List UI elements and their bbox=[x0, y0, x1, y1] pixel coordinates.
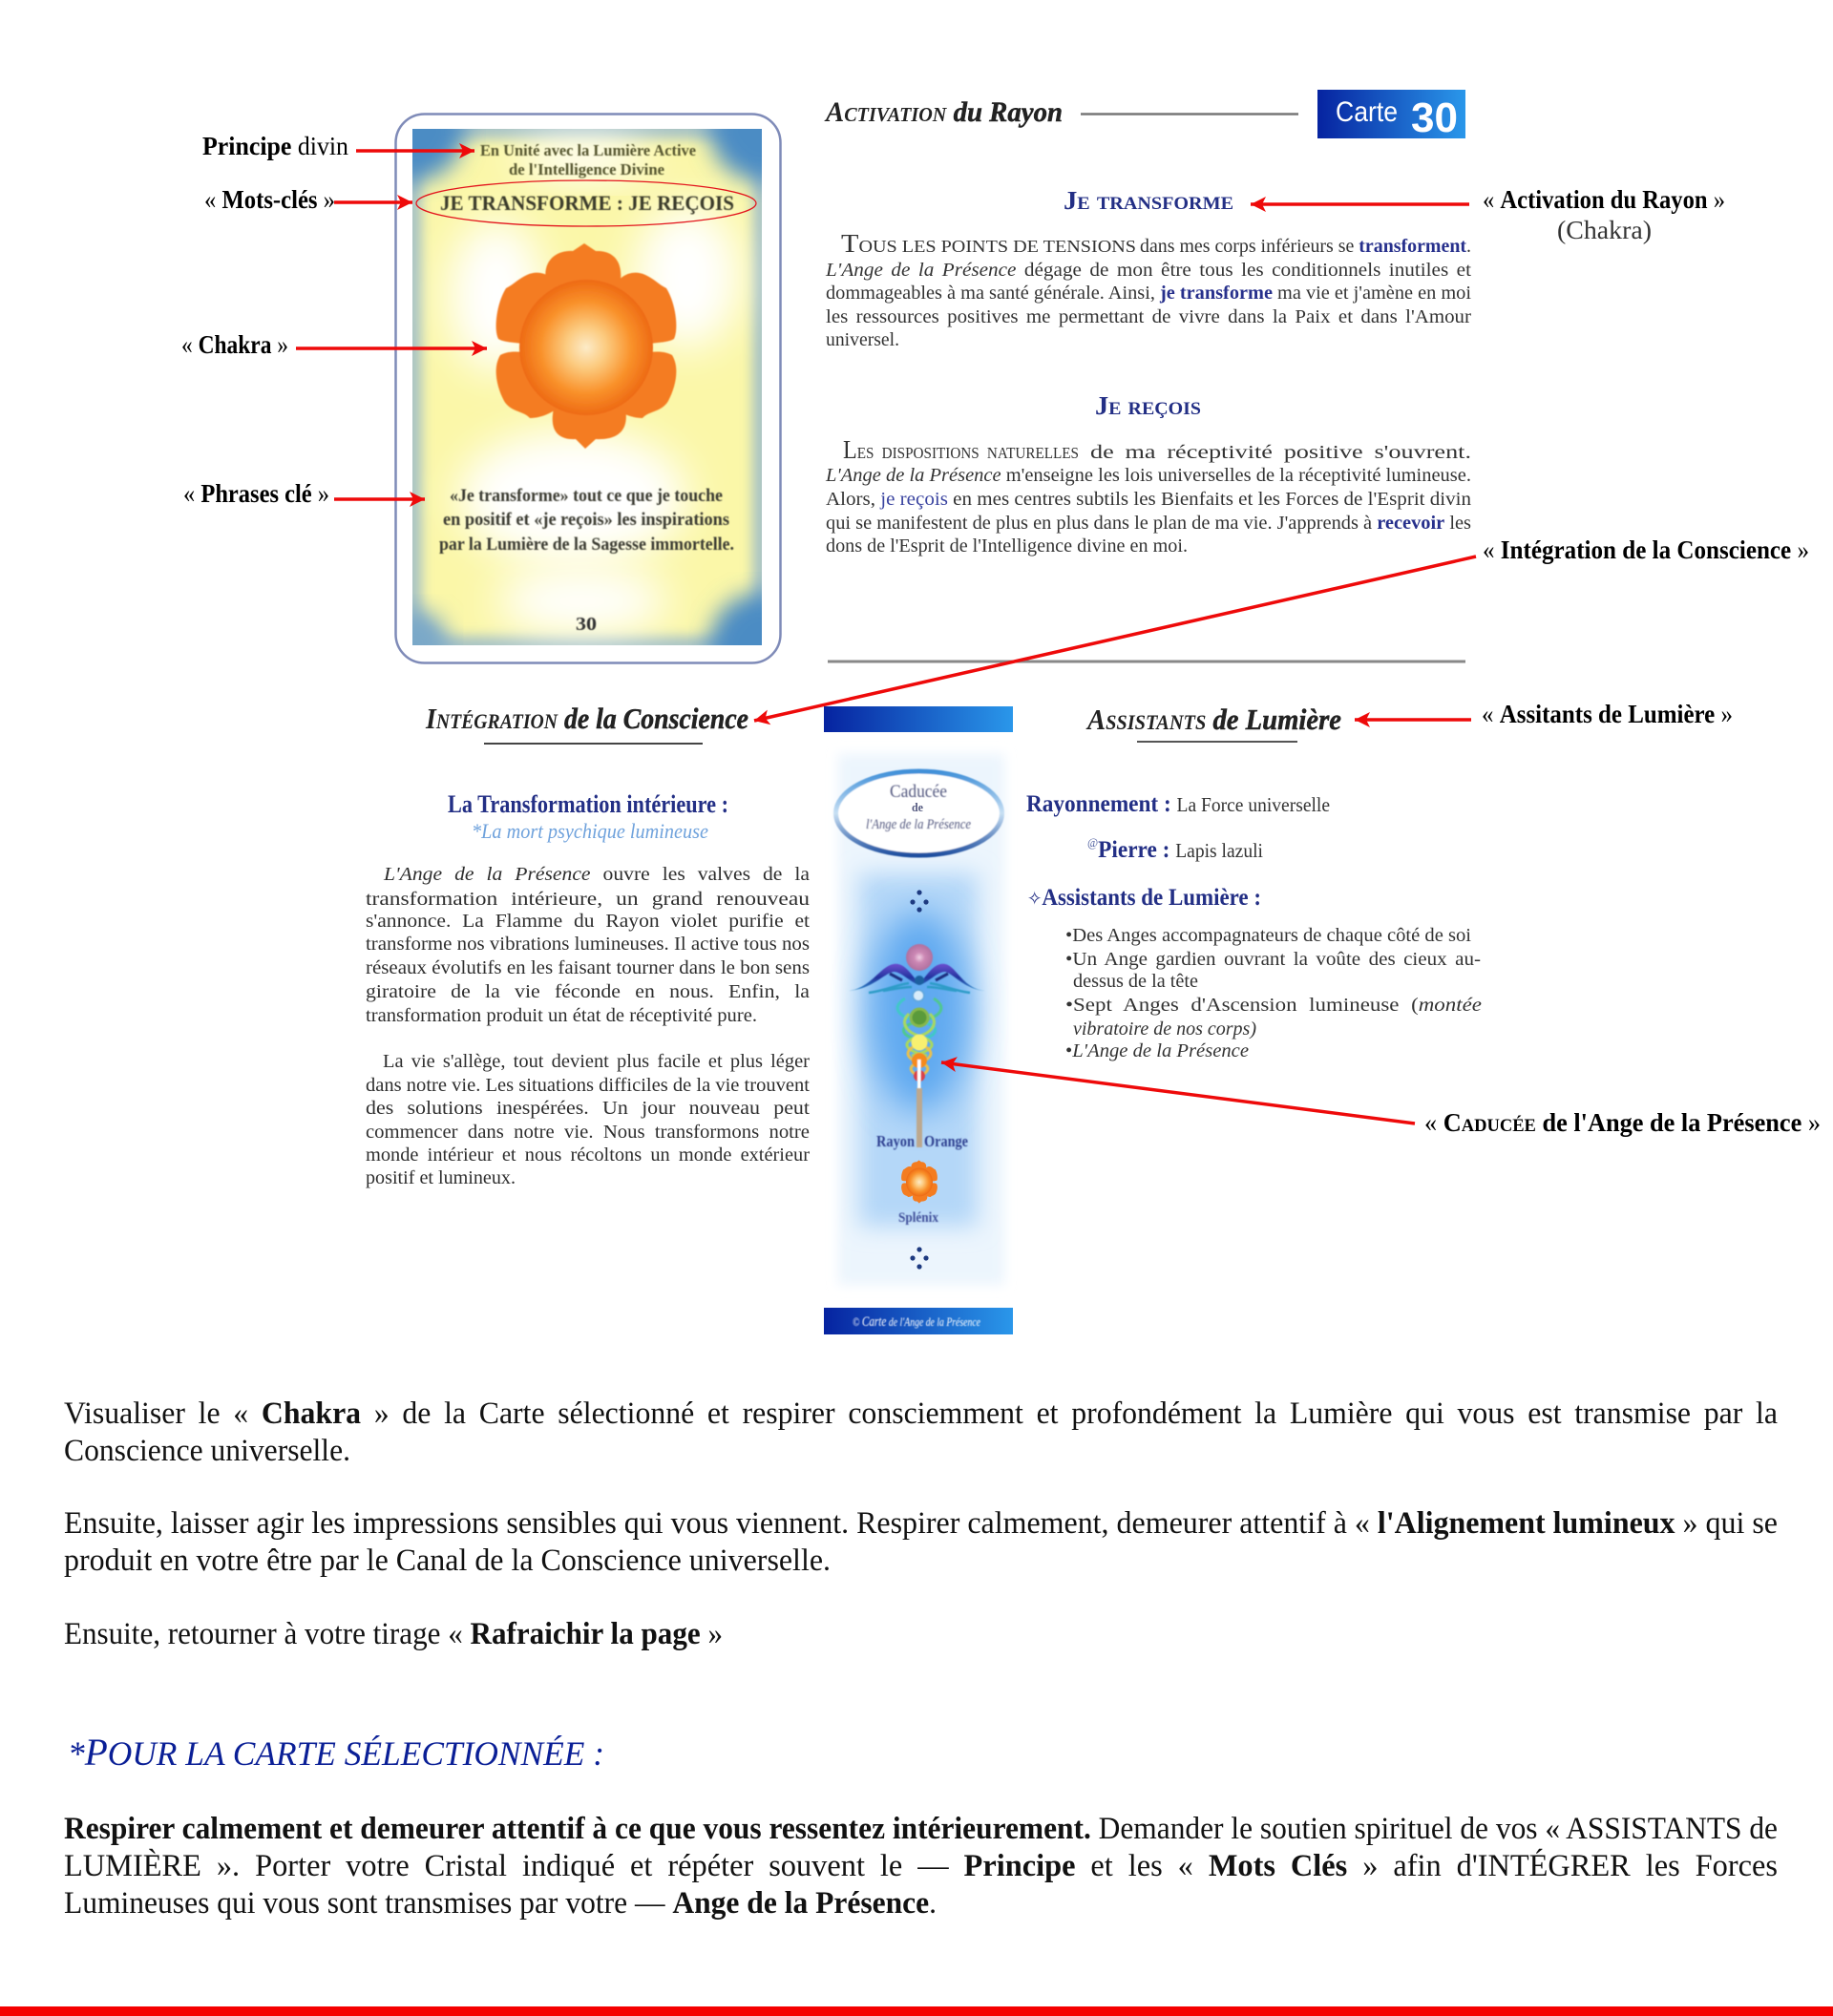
text block: paragraph two bbox=[366, 1051, 810, 1188]
card text bbox=[439, 141, 734, 635]
pierre line: Lapis lazuli bbox=[1175, 839, 1263, 862]
text block: je reçois: LES DISPOSITIONS NATURELLES bbox=[843, 435, 1079, 464]
text block: je reçois: L'Ange de la Présence m'enseigne les lois universelles de la réceptivité lumineuse. bbox=[825, 465, 1471, 486]
heading: intégration: Intégration de la Conscience bbox=[425, 702, 748, 735]
label: activation du rayon: « Activation du Rayon » bbox=[1483, 185, 1725, 214]
subtitle: *La mort psychique lumineuse bbox=[472, 819, 708, 843]
card outline bbox=[395, 115, 781, 662]
heading: je reçois: Je reçois bbox=[1095, 391, 1201, 420]
bullet list bbox=[1065, 925, 1482, 1061]
bullet list: •Un Ange gardien ouvrant la voûte des cieux au- bbox=[1065, 949, 1481, 970]
text block: je reçois: qui se manifestent de plus en plus dans le plan de ma vie. J'apprends à recevoir les bbox=[826, 513, 1471, 534]
badge: carte 30 bbox=[1317, 90, 1465, 141]
chakra flower bbox=[496, 243, 676, 449]
text block: je reçois: de ma réceptivité positive s'ouvrent. bbox=[1090, 442, 1471, 463]
text block: je transforme: TOUS LES POINTS DE TENSIONS bbox=[841, 229, 1136, 258]
caducée title ellipse bbox=[836, 771, 1002, 855]
pierre line: @ bbox=[1087, 835, 1098, 850]
panel: assistants de lumière bbox=[1026, 703, 1482, 1061]
text block: paragraph one: giratoire de la vie féconde en nous. Enfin, la bbox=[366, 981, 810, 1002]
heading: pour la carte sélectionnée: *POUR LA CARTE SÉLECTIONNÉE : bbox=[68, 1731, 604, 1774]
heading: assistants: Assistants de Lumière bbox=[1085, 703, 1341, 736]
label: phrases clé: « Phrases clé » bbox=[183, 479, 329, 508]
text block: closing paragraph: LUMIÈRE ». Porter votre Cristal indiqué et répéter souvent le — Principe et les « Mots Clés » afin d'INTÉGRER les Forces bbox=[64, 1848, 1778, 1883]
paragraph: visualiser bbox=[64, 1396, 1778, 1468]
divine principle text bbox=[480, 141, 696, 178]
paragraph: ensuite: Ensuite, laisser agir les impressions sensibles qui vous viennent. Respirer calmement, demeurer attentif à « l'Alignement lumineux » qui se bbox=[64, 1506, 1778, 1541]
wings bbox=[848, 964, 985, 993]
heading: activation du rayon: Activation du Rayon bbox=[824, 96, 1063, 128]
arrow: caducée bbox=[941, 1062, 1415, 1124]
bullet list: •L'Ange de la Présence bbox=[1065, 1040, 1249, 1061]
arrow: phrases bbox=[334, 497, 425, 501]
key phrase text bbox=[439, 486, 734, 555]
label: splénix: Splénix bbox=[898, 1210, 938, 1226]
paragraph: ensuite bbox=[64, 1506, 1778, 1578]
arrows: left annotations bbox=[296, 151, 487, 499]
top bar bbox=[824, 706, 1013, 732]
bullet list: •Sept Anges d'Ascension lumineuse ( montée bbox=[1065, 995, 1482, 1016]
arrow: chakra bbox=[296, 346, 487, 350]
key phrase text: en positif et «je reçois» les inspirations bbox=[443, 510, 729, 530]
heart chakra bbox=[911, 1009, 928, 1026]
text block: paragraph two: dans notre vie. Les situations difficiles de la vie trouvent bbox=[366, 1075, 810, 1096]
text block: je reçois bbox=[825, 435, 1471, 556]
subheading: la transformation intérieure: La Transformation intérieure : bbox=[448, 790, 728, 818]
text block: paragraph two: monde intérieur et nous récoltons un monde extérieur bbox=[366, 1144, 810, 1166]
panel: activation du rayon bbox=[824, 90, 1471, 662]
text block: paragraph two: commencer dans notre vie. Nous transformons notre bbox=[366, 1122, 810, 1143]
text block: je transforme bbox=[825, 229, 1471, 350]
arrow: mots-clés bbox=[334, 200, 412, 204]
caducée title ellipse: Caducée bbox=[890, 782, 947, 802]
caducée title ellipse: de bbox=[912, 800, 923, 814]
text block: paragraph one: réseaux évolutifs en les faisant tourner dans le bon sens bbox=[366, 957, 810, 978]
key phrase text: par la Lumière de la Sagesse immortelle. bbox=[439, 535, 734, 555]
badge: carte 30: 30 bbox=[1411, 94, 1458, 141]
label: caducée: « Caducée de l'Ange de la Présence » bbox=[1424, 1108, 1821, 1137]
key phrase text: «Je transforme» tout ce que je touche bbox=[450, 486, 723, 506]
card number: 30 bbox=[576, 614, 597, 635]
label: intégration de la conscience: « Intégration de la Conscience » bbox=[1483, 536, 1809, 564]
white staff bbox=[917, 1060, 920, 1088]
bullet list: •Des Anges accompagnateurs de chaque côté de soi bbox=[1065, 925, 1471, 946]
heading: je transforme: Je transforme bbox=[1064, 186, 1233, 215]
icon: top dots bbox=[910, 890, 929, 913]
rod bbox=[916, 1088, 922, 1147]
key words ellipse bbox=[416, 180, 756, 226]
icon: bottom dots bbox=[910, 1247, 929, 1270]
text block: instructions bbox=[64, 1396, 1778, 1651]
bullet list: dessus de la tête bbox=[1073, 971, 1198, 992]
bottom red bar bbox=[0, 2006, 1833, 2016]
right annotation labels bbox=[1424, 185, 1821, 1137]
label: chakra: « Chakra » bbox=[181, 330, 288, 359]
label: principe divin: Principe divin bbox=[202, 132, 348, 160]
text block: je reçois: Alors, je reçois en mes centres subtils les Bienfaits et les Forces de l'Esprit divin bbox=[826, 489, 1471, 510]
column background glow bbox=[838, 754, 1004, 1285]
sacral chakra bbox=[912, 1053, 927, 1068]
root chakra bbox=[914, 1070, 925, 1082]
bottom bar caption: © Carte de l'Ange de la Présence bbox=[853, 1314, 980, 1330]
solar chakra bbox=[911, 1035, 928, 1050]
panel: oracle card 30 bbox=[360, 76, 814, 698]
rayonnement line: Rayonnement : La Force universelle bbox=[1026, 791, 1330, 817]
card artwork background bbox=[412, 129, 762, 645]
panel: caducée column bbox=[824, 706, 1013, 1334]
label: activation du rayon bbox=[1483, 185, 1725, 244]
paragraph: ensuite: produit en votre être par le Canal de la Conscience universelle. bbox=[64, 1544, 831, 1578]
arrow: principe bbox=[356, 149, 474, 153]
label: mots-clés: « Mots-clés » bbox=[204, 185, 335, 214]
text block: paragraph two: des solutions inespérées. Un jour nouveau peut bbox=[366, 1098, 810, 1119]
text block: paragraph one: s'annonce. La Flamme du Rayon violet purifie et bbox=[366, 911, 810, 932]
badge: carte 30: Carte bbox=[1336, 96, 1398, 128]
paragraph: visualiser: Visualiser le « Chakra » de la Carte sélectionné et respirer consciemment et profondément la Lumière qui vous est transmise par la bbox=[64, 1396, 1778, 1431]
divine principle text: En Unité avec la Lumière Active bbox=[480, 141, 696, 159]
text block: closing paragraph bbox=[64, 1812, 1778, 1921]
text block: je transforme: dans mes corps inférieurs se transforment. bbox=[1140, 236, 1471, 257]
arrows: right annotations bbox=[754, 204, 1476, 1124]
text block: je transforme: les ressources positives me permettant de vivre dans la Paix et dans l'Amour bbox=[826, 306, 1471, 327]
pierre line: Pierre : bbox=[1098, 837, 1169, 863]
text block: je transforme: universel. bbox=[826, 329, 899, 350]
assistants subheading: ✧Assistants de Lumière : bbox=[1027, 885, 1261, 911]
crown chakra bbox=[906, 944, 933, 971]
arrow: assistants bbox=[1355, 718, 1471, 722]
label: assistants de lumière: « Assitants de Lumière » bbox=[1482, 700, 1733, 728]
text block: closing paragraph: Lumineuses qui vous sont transmises par votre — Ange de la Présence. bbox=[64, 1886, 937, 1921]
text block: je transforme: L'Ange de la Présence dégage de mon être tous les conditionnels inutiles et bbox=[825, 260, 1471, 281]
bullet list: vibratoire de nos corps) bbox=[1073, 1018, 1256, 1040]
throat chakras bbox=[915, 976, 924, 985]
label: activation du rayon: (Chakra) bbox=[1557, 216, 1652, 244]
text block: paragraph two: positif et lumineux. bbox=[366, 1167, 516, 1188]
text block: paragraph one: transformation produit un état de réceptivité pure. bbox=[366, 1005, 757, 1026]
ray label: Rayon bbox=[876, 1132, 915, 1150]
text block: paragraph one: L'Ange de la Présence ouvre les valves de la bbox=[383, 864, 810, 885]
text block: je transforme: dommageables à ma santé générale. Ainsi, je transforme ma vie et j'amène en moi bbox=[826, 283, 1471, 304]
ray label: Orange bbox=[924, 1132, 968, 1150]
text block: paragraph one bbox=[366, 864, 810, 1026]
icon: caduceus bbox=[848, 944, 985, 1147]
bottom bar bbox=[824, 1308, 1013, 1334]
text block: paragraph one: transforme nos vibrations lumineuses. Il active tous nos bbox=[366, 934, 810, 955]
icon: small chakra flower bbox=[901, 1161, 938, 1204]
arrow: intégration bbox=[754, 556, 1476, 721]
divine principle text: de l'Intelligence Divine bbox=[509, 160, 664, 178]
ray label bbox=[876, 1132, 968, 1150]
key words text: JE TRANSFORME : JE REÇOIS bbox=[440, 191, 734, 215]
text block: paragraph two: La vie s'allège, tout devient plus facile et plus léger bbox=[383, 1051, 810, 1072]
text block: paragraph one: transformation intérieure, un grand renouveau bbox=[366, 889, 810, 910]
caducée title ellipse: l'Ange de la Présence bbox=[866, 817, 971, 832]
panel: intégration de la conscience bbox=[366, 702, 810, 1188]
arrow: activation bbox=[1251, 202, 1469, 206]
coiled serpents bbox=[897, 998, 941, 1077]
left annotation labels bbox=[181, 132, 348, 508]
paragraph: visualiser: Conscience universelle. bbox=[64, 1434, 350, 1468]
paragraph: rafraichir: Ensuite, retourner à votre tirage « Rafraichir la page » bbox=[64, 1617, 723, 1651]
text block: je reçois: dons de l'Esprit de l'Intelligence divine en moi. bbox=[826, 536, 1188, 556]
text block: closing paragraph: Respirer calmement et demeurer attentif à ce que vous ressentez intérieurement. Demander le soutien spirituel de vos « ASSISTANTS de bbox=[64, 1812, 1778, 1846]
